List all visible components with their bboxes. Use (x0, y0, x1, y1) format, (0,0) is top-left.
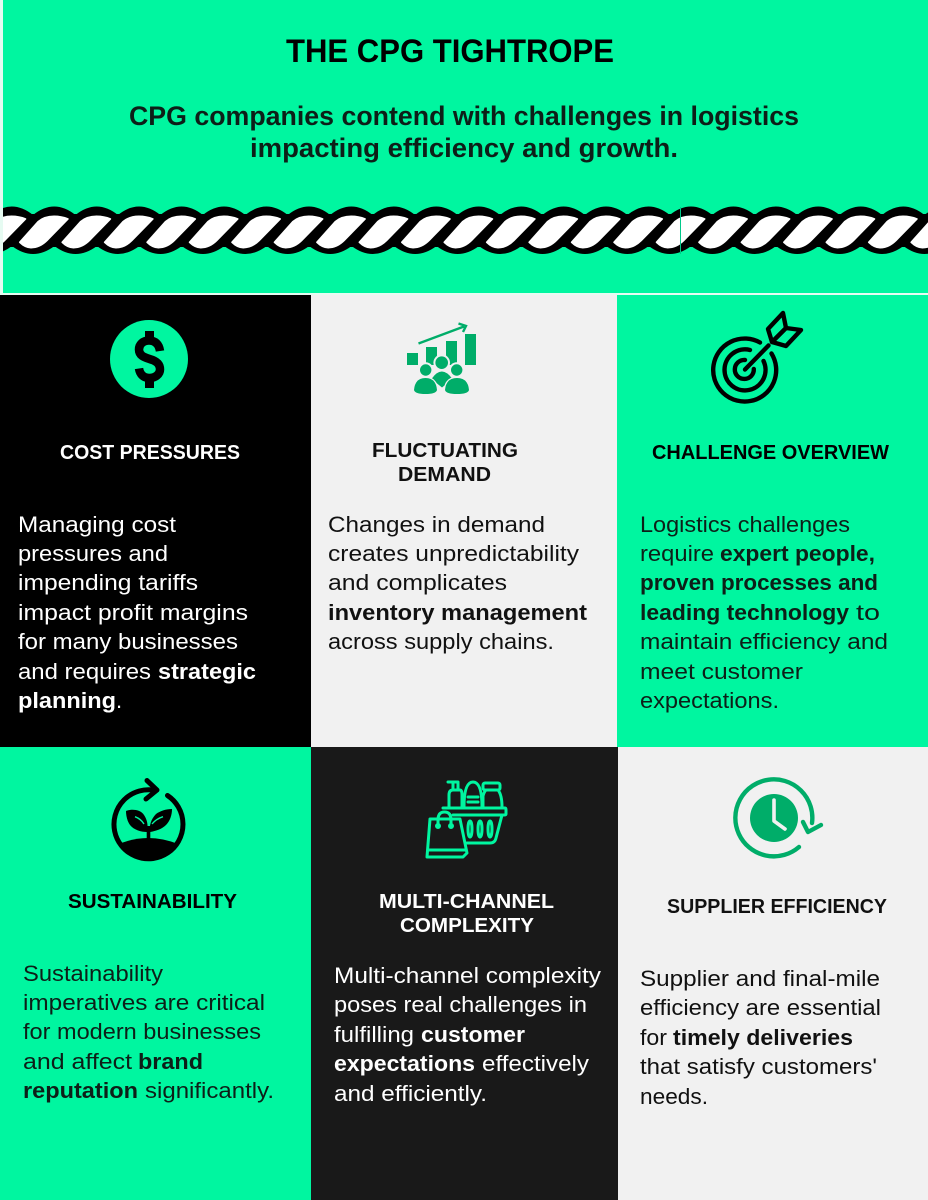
text: challenge overview body: maintain efficiency and (640, 629, 888, 654)
heading: fluctuating demand: DEMAND (398, 464, 491, 486)
text: cost pressures body: planning (18, 688, 116, 713)
text: sustainability body (23, 961, 274, 1103)
heading: fluctuating demand (372, 440, 518, 486)
text: supplier efficiency body: efficiency are essential (640, 995, 881, 1020)
text: cost pressures body (18, 512, 256, 713)
text: multi-channel body: Multi-channel complexity (334, 963, 601, 988)
heading: sustainability: SUSTAINABILITY (68, 891, 238, 913)
text: cost pressures body: Managing cost (18, 512, 176, 537)
text: supplier efficiency body: for (640, 1025, 667, 1050)
text: sustainability body: Sustainability (23, 961, 163, 986)
icon: target with arrow (713, 313, 801, 402)
text: multi-channel body: customer (421, 1022, 525, 1047)
panel: multi-channel complexity (311, 747, 618, 1200)
subtitle (129, 101, 799, 163)
text: supplier efficiency body: needs. (640, 1084, 708, 1109)
heading: supplier efficiency: SUPPLIER EFFICIENCY (667, 896, 888, 918)
heading: cost pressures: COST PRESSURES (60, 442, 240, 464)
text: supplier efficiency body: timely deliveries (673, 1025, 853, 1050)
subtitle: impacting efficiency and growth. (250, 133, 678, 163)
panel: challenge overview (617, 295, 928, 747)
text: fluctuating demand body: and complicates (328, 570, 507, 595)
text: multi-channel body: fulfilling (334, 1022, 414, 1047)
heading: fluctuating demand: FLUCTUATING (372, 440, 518, 462)
icon: shopping basket and bag (427, 782, 506, 857)
icon: dollar coin (110, 320, 188, 398)
text: supplier efficiency body: that satisfy customers' (640, 1054, 877, 1079)
text: sustainability body: significantly. (145, 1078, 274, 1103)
text: fluctuating demand body (328, 512, 588, 654)
title: THE CPG TIGHTROPE (286, 33, 614, 69)
icon: clock with circular arrow (735, 779, 821, 856)
text: multi-channel body: and efficiently. (334, 1081, 487, 1106)
text: sustainability body: reputation (23, 1078, 138, 1103)
text: cost pressures body: impact profit margins (18, 600, 248, 625)
text: fluctuating demand body: across supply chains. (328, 629, 554, 654)
text: cost pressures body: impending tariffs (18, 570, 198, 595)
text: multi-channel body: poses real challenges in (334, 992, 587, 1017)
panel: sustainability (0, 747, 311, 1200)
text: challenge overview body: expert people, (720, 541, 875, 566)
heading: challenge overview: CHALLENGE OVERVIEW (652, 442, 889, 464)
text: cost pressures body: and requires (18, 659, 151, 684)
text: sustainability body: and affect (23, 1049, 132, 1074)
text: challenge overview body: to (856, 600, 880, 625)
text: sustainability body: brand (138, 1049, 203, 1074)
text: cost pressures body: pressures and (18, 541, 168, 566)
text: challenge overview body: require (640, 541, 714, 566)
text: cost pressures body: . (116, 688, 122, 713)
text: cost pressures body: for many businesses (18, 629, 238, 654)
text: challenge overview body (640, 512, 888, 713)
icon: sprout in circular arrow (114, 780, 183, 860)
rope divider (0, 206, 928, 254)
heading: multi-channel complexity (379, 891, 554, 937)
text: challenge overview body: proven processes and (640, 570, 878, 595)
panel: header (0, 0, 928, 295)
panel: cost pressures (0, 295, 311, 747)
heading: multi-channel complexity: COMPLEXITY (400, 915, 535, 937)
text: sustainability body: imperatives are critical (23, 990, 265, 1015)
text: sustainability body: for modern businesses (23, 1019, 261, 1044)
panel: fluctuating demand (311, 295, 617, 747)
text: challenge overview body: Logistics challenges (640, 512, 850, 537)
text: supplier efficiency body (640, 966, 881, 1109)
text: supplier efficiency body: Supplier and final-mile (640, 966, 880, 991)
text: multi-channel body: effectively (482, 1051, 589, 1076)
text: multi-channel body: expectations (334, 1051, 475, 1076)
heading: multi-channel complexity: MULTI-CHANNEL (379, 891, 554, 913)
icon: growth chart and people (407, 324, 476, 394)
text: multi-channel body (334, 963, 601, 1106)
text: fluctuating demand body: creates unpredictability (328, 541, 579, 566)
text: fluctuating demand body: Changes in demand (328, 512, 545, 537)
text: cost pressures body: strategic (158, 659, 256, 684)
text: challenge overview body: leading technology (640, 600, 850, 625)
panel: supplier efficiency (618, 747, 928, 1200)
subtitle: CPG companies contend with challenges in logistics (129, 101, 799, 131)
text: challenge overview body: meet customer (640, 659, 803, 684)
text: fluctuating demand body: inventory management (328, 600, 588, 625)
text: challenge overview body: expectations. (640, 688, 779, 713)
